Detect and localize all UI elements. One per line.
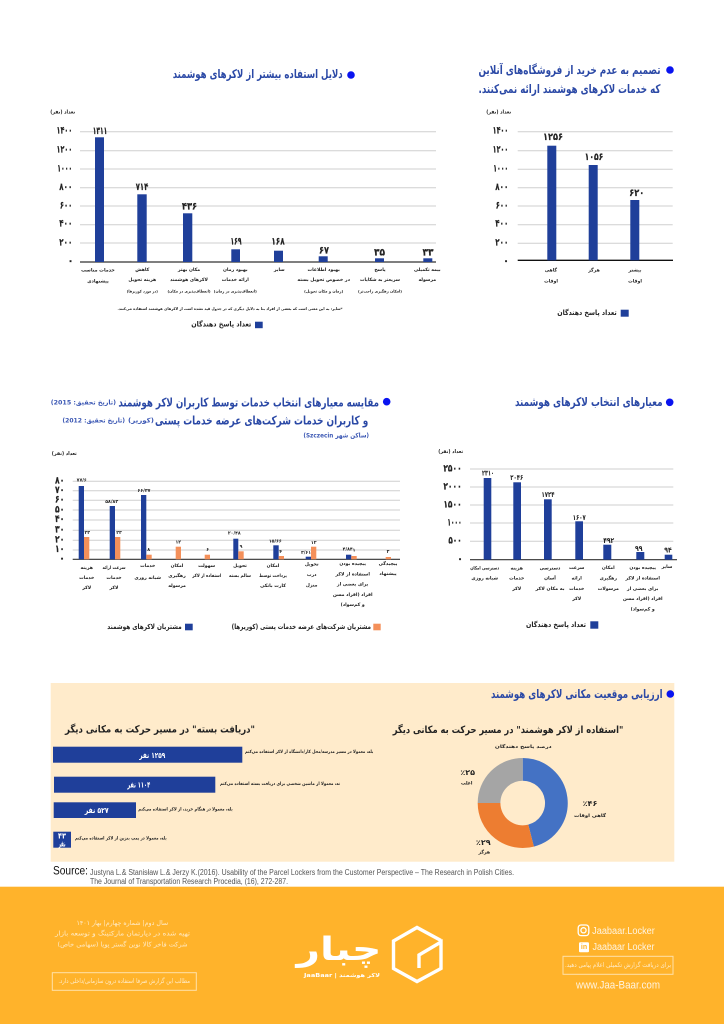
grid and y axis: ۱۰ xyxy=(55,544,64,555)
heading xyxy=(478,62,661,97)
category labels: در خصوص تحویل بسته xyxy=(297,278,351,283)
category labels: استفاده از لاکر xyxy=(334,572,370,578)
category labels: پیشنهادی xyxy=(87,280,109,284)
heading: (ساکن شهر Szczecin) xyxy=(303,432,369,440)
category labels xyxy=(81,267,441,294)
category labels: رهگیری xyxy=(600,574,617,582)
category labels: پاسخ xyxy=(374,268,386,273)
bar values: ۲۳ xyxy=(84,530,90,536)
bar chart xyxy=(547,146,639,260)
grid and y axis: ۰ xyxy=(503,256,509,267)
category labels: امکان xyxy=(171,563,184,569)
bar values xyxy=(58,751,165,848)
category labels: بهبود اطلاعات xyxy=(308,268,340,273)
grid and y axis: ۰ xyxy=(59,554,65,564)
category labels: گاهی xyxy=(545,266,557,274)
subheading: locker use: "استفاده از لاکر هوشمند" در مسیر حرکت به مکانی دیگر xyxy=(392,723,623,736)
category labels: پیچیده بودن xyxy=(629,566,656,571)
heading: (تاریخ تحقیق: 2012) xyxy=(62,417,125,425)
category labels: پیچیده بودن xyxy=(339,562,366,567)
axis unit: تعداد (نفر) xyxy=(52,451,77,457)
source citation: The Journal of Transportation Research Procedia, (16), 272-287. xyxy=(90,877,288,886)
category labels: به مکان لاکر xyxy=(534,586,565,592)
category labels: مرسوله xyxy=(418,278,436,283)
category labels: برای بعضی از xyxy=(626,587,659,592)
category labels: آسان xyxy=(544,576,556,582)
category labels: استفاده از لاکر xyxy=(624,576,660,582)
heading: معیارهای انتخاب لاکرهای هوشمند xyxy=(515,395,663,410)
grid and y axis: ۶۰۰ xyxy=(496,200,508,212)
category labels: (در مورد کوریرها) xyxy=(127,290,158,294)
footer: publication info: سال دوم| شماره چهارم| بهار ۱۴۰۱ xyxy=(76,919,168,927)
grid and y axis: ۳۰ xyxy=(55,524,64,536)
grid and y axis: ۱۴۰۰ xyxy=(57,126,72,136)
category labels: و کم‌سواد) xyxy=(341,602,365,608)
bar values: ۴۹۲ xyxy=(603,536,615,545)
logo wordmark: لاکر هوشمند | JaaBaar xyxy=(303,972,380,979)
grid and y axis: ۲۰۰ xyxy=(495,238,508,248)
legend: تعداد پاسخ دهندگان xyxy=(191,320,252,329)
grid and y axis: ۸۰ xyxy=(55,476,64,486)
category labels: لاکر xyxy=(571,596,581,602)
category labels: پیشنهاد xyxy=(379,572,397,577)
bar values: ۶۷ xyxy=(319,246,329,256)
bar values: ۵۸/۸۳ xyxy=(105,499,118,505)
grid and y axis: ۴۰ xyxy=(55,514,64,525)
bar chart xyxy=(484,478,672,560)
category labels: منزل xyxy=(306,584,318,588)
category labels: سرعت ارائه xyxy=(102,566,126,571)
bar values: ۹۹ xyxy=(635,544,643,553)
bar values: ۸ xyxy=(147,548,150,553)
bar values: ۳/۶۱ xyxy=(301,550,311,556)
axis unit: تعداد (نفر) xyxy=(438,449,463,455)
category labels: (انعطاف‌پذیری در مکان) xyxy=(168,290,211,294)
category labels: پرداخت توسط xyxy=(259,574,287,579)
footer: internal use notice: مطالب این گزارش صرفا استفاده درون سازمانی/داخلی دارد. xyxy=(58,977,190,985)
category labels: تحویل xyxy=(305,562,319,568)
bar values: ۹ xyxy=(240,545,243,550)
source citation xyxy=(53,866,514,886)
grid and y axis: ۸۰۰ xyxy=(495,182,508,193)
bars: courier customers xyxy=(84,537,391,559)
category labels: هزینه xyxy=(510,566,523,572)
logo wordmark: چبار xyxy=(294,930,382,968)
category labels: سالم بسته xyxy=(229,574,251,579)
bar values xyxy=(93,126,434,258)
icon: linkedin xyxy=(579,942,589,952)
chart caption: درصد پاسخ دهندگان xyxy=(495,743,552,750)
bar captions: بله، معمولا در پمپ بنزین از لاکر استفاده می‌کنم xyxy=(75,836,167,842)
heading: مقایسه معیارهای انتخاب خدمات توسط کاربران لاکر هوشمند xyxy=(118,395,379,410)
legend xyxy=(107,623,381,631)
category labels: برای بعضی از xyxy=(336,582,369,588)
bar values: ۱۲ xyxy=(311,540,317,546)
bar values: ۵۲۷ نفر xyxy=(84,806,109,815)
category labels: اوقات xyxy=(628,280,642,284)
category labels: امکان xyxy=(602,565,615,571)
footer: contact notice: برای دریافت گزارش تکمیلی اعلام پیامی دهید. xyxy=(565,961,671,969)
category labels: ارائه خدمات xyxy=(222,278,249,283)
donut labels: هرگز xyxy=(478,848,490,856)
panel: reasons for using smart lockers more xyxy=(50,67,441,329)
website: www.Jaa-Baar.com xyxy=(575,980,660,992)
bar captions: بله، معمولا در مسیر مدرسه/محل کار/دانشگاه از لاکر استفاده می‌کنم xyxy=(245,748,374,755)
bar captions xyxy=(75,748,374,842)
category labels: خدمات xyxy=(79,576,94,581)
grid and y axis: ۴۰۰ xyxy=(495,218,508,230)
grid and y axis: ۲۵۰۰ xyxy=(443,464,462,474)
category labels: سهولت xyxy=(198,564,216,569)
instagram handle: Jaabaar.Locker xyxy=(592,926,655,937)
category labels: افراد (افراد مسن xyxy=(623,596,663,602)
bar values: ۴/۸۴ xyxy=(343,546,353,552)
category labels: (زمان و مکان تحویل) xyxy=(304,290,344,294)
heading marker xyxy=(666,690,674,698)
category labels: لاکرهای هوشمند xyxy=(170,277,208,283)
category labels: دسترسی xyxy=(540,566,561,572)
category labels: استفاده از لاکر xyxy=(191,573,222,579)
category labels: لاکر xyxy=(511,586,521,592)
category labels: هرگز xyxy=(587,266,600,274)
category labels: شبانه روزی xyxy=(134,576,161,581)
bar values: ۶۶/۳۷ xyxy=(138,488,151,494)
bar values xyxy=(77,478,390,556)
category labels: بیمه تکمیلی xyxy=(414,267,441,273)
bar values: ۲۳ xyxy=(116,530,122,536)
category labels xyxy=(544,266,642,284)
bar values xyxy=(543,132,644,199)
grid and y axis: ۵۰ xyxy=(55,504,64,516)
bar values: ۱۵/۶۶ xyxy=(269,538,282,544)
heading: reasons: دلایل استفاده بیشتر از لاکرهای هوشمند xyxy=(173,67,343,82)
bar values: ۲۰/۴۸ xyxy=(228,530,241,536)
grid and y axis: ۴۰۰ xyxy=(59,218,72,230)
bar values: ۶۲۰ xyxy=(629,188,644,199)
bar values: ۷۱۴ xyxy=(136,182,148,193)
panel: comparison of selection criteria xyxy=(51,395,400,631)
donut labels: اغلب xyxy=(461,782,473,786)
category labels: درب xyxy=(307,573,317,578)
category labels: (انعطاف‌پذیری در زمان) xyxy=(214,290,257,294)
bar values: ۴۳ xyxy=(58,832,66,840)
category labels: مکان بهتر xyxy=(177,267,200,273)
footer: publication info: تهیه شده در دپارتمان مارکتینگ و توسعه بازار xyxy=(54,929,190,937)
bar values: ۱۶۰۷ xyxy=(573,513,586,522)
category labels: سرعت xyxy=(569,566,585,571)
panel: locker location evaluation xyxy=(51,683,674,862)
bar values: ۱۳۱۱ xyxy=(93,126,107,137)
category labels: شبانه روزی xyxy=(471,576,498,582)
legend: مشتریان لاکرهای هوشمند xyxy=(107,623,182,631)
legend: تعداد پاسخ دهندگان xyxy=(526,620,586,629)
category labels: بهبود زمان xyxy=(223,268,248,273)
donut labels: ٪۲۹ xyxy=(476,838,491,847)
heading marker xyxy=(383,398,391,406)
category labels: سایر xyxy=(661,565,673,570)
grid and y axis: ۶۰۰ xyxy=(60,200,72,212)
grid and y axis xyxy=(57,126,436,267)
bar chart xyxy=(95,137,432,262)
category labels: مرسولات xyxy=(598,587,619,592)
heading: (تاریخ تحقیق: 2015) xyxy=(51,398,116,406)
source citation: Justyna L.& Stanisław L.& Jerzy K.(2016). Usability of the Parcel Lockers from the Customer Perspective – The Research in Polish Cities. xyxy=(90,868,514,877)
category labels: کاهش xyxy=(135,267,150,273)
category labels: لاکر xyxy=(81,585,91,591)
category labels: هزینه تحویل xyxy=(128,278,156,283)
footer: publication info xyxy=(54,919,190,948)
grid and y axis: ۷۰ xyxy=(55,485,64,496)
bar values: ۱۰۵۶ xyxy=(585,152,603,163)
bar values: ۱۶۹ xyxy=(230,236,242,248)
icon: linkedin: in xyxy=(581,944,587,951)
category labels: (امکان رهگیری راحت‌تر) xyxy=(358,289,402,294)
grid and y axis: ۰ xyxy=(67,256,74,267)
category labels: هزینه xyxy=(80,566,93,571)
axis unit: تعداد (نفر) xyxy=(50,110,75,116)
category labels: سریعتر به شکایات xyxy=(360,277,400,283)
category labels: خدمات xyxy=(140,564,155,569)
heading marker xyxy=(347,71,355,79)
subheading: parcel pickup: "دریافت بسته" در مسیر حرکت به مکانی دیگر xyxy=(64,722,255,736)
footer: publication info: شرکت فاخر کالا نوین گستر پویا (سهامی خاص) xyxy=(58,940,188,948)
bar values: ۱۲۵۶ xyxy=(543,132,563,143)
category labels: تحویل xyxy=(233,564,247,569)
heading marker xyxy=(666,398,674,406)
bar values: ۱۷۲۴ xyxy=(542,490,555,499)
bar values: ۱ xyxy=(353,548,355,554)
grid and y axis: ۱۲۰۰ xyxy=(493,144,508,156)
panel background xyxy=(51,683,674,862)
donut labels: ٪۴۶ xyxy=(583,799,597,808)
category labels: اوقات xyxy=(544,280,558,284)
category labels xyxy=(470,565,673,612)
category labels: دسترسی امکان xyxy=(470,566,500,572)
grid and y axis: ۲۰۰۰ xyxy=(443,482,462,492)
category labels: ارائه xyxy=(572,576,582,582)
bar captions: نه، معمولا از ماشین شخصی برای دریافت بسته استفاده می‌کنم xyxy=(220,781,340,787)
bar values: ۴ xyxy=(279,550,282,555)
grid and y axis: ۰ xyxy=(457,554,463,565)
grid and y axis: ۶۰ xyxy=(55,494,64,506)
grid and y axis: ۲۰۰ xyxy=(59,238,72,248)
logo wordmark xyxy=(294,930,382,979)
bar values: ۲۰۴۶ xyxy=(510,473,523,482)
footer band xyxy=(0,887,724,1024)
grid and y axis xyxy=(493,126,673,267)
heading: تصمیم به عدم خرید از فروشگاه‌های آنلاین xyxy=(478,62,660,78)
horizontal bars xyxy=(53,747,242,848)
linkedin handle: Jaabaar Locker xyxy=(592,942,655,953)
category labels: سایر xyxy=(273,268,285,273)
grid and y axis: ۱۴۰۰ xyxy=(493,126,508,136)
bar values: ۱۱۰۴ نفر xyxy=(127,780,150,790)
bar values xyxy=(482,468,672,554)
category labels: پیچیدگی xyxy=(379,560,398,567)
bar values: نفر xyxy=(58,840,66,848)
heading marker xyxy=(666,66,674,74)
bars: smart locker customers xyxy=(79,486,351,559)
category labels: خدمات مناسب xyxy=(81,268,115,274)
category labels: مرسوله xyxy=(168,584,186,589)
grid and y axis: ۱۰۰۰ xyxy=(57,164,72,174)
grid and y axis xyxy=(55,476,400,564)
category labels: امکان xyxy=(267,563,280,569)
heading: ارزیابی موقعیت مکانی لاکرهای هوشمند xyxy=(491,687,663,702)
legend: تعداد پاسخ دهندگان xyxy=(557,308,617,317)
panel: smart locker selection criteria xyxy=(438,395,677,629)
category labels: رهگیری xyxy=(168,572,186,579)
heading xyxy=(51,395,379,440)
footer: contact notice xyxy=(563,956,673,974)
donut labels: گاهی اوقات xyxy=(574,812,606,819)
heading: (کوریر) xyxy=(128,417,154,425)
grid and y axis xyxy=(443,464,677,565)
category labels: و کم‌سواد) xyxy=(631,606,655,612)
grid and y axis: ۱۲۰۰ xyxy=(57,144,72,156)
bar values: ۱۲۵۹ نفر xyxy=(139,751,165,760)
category labels: کارت بانکی xyxy=(260,583,286,589)
category labels xyxy=(79,560,398,608)
heading: و کاربران خدمات شرکت‌های عرضه خدمات پستی xyxy=(155,414,368,429)
bar values: ۴۳۶ xyxy=(182,202,197,212)
donut labels xyxy=(460,768,606,856)
category labels: خدمات xyxy=(509,576,524,582)
bar values: ۹۴ xyxy=(664,546,672,554)
grid and y axis: ۸۰۰ xyxy=(59,182,72,193)
bar values: ۱۲ xyxy=(175,540,181,546)
category labels: افراد (افراد مسن xyxy=(333,592,373,598)
panel: decision not to buy from online stores xyxy=(478,62,674,317)
bar values: ۲ xyxy=(387,549,390,555)
donut labels: ٪۲۵ xyxy=(460,768,476,777)
icon: instagram xyxy=(578,925,589,936)
bar values: ۳۵ xyxy=(374,248,385,258)
grid and y axis: ۲۰ xyxy=(55,534,64,546)
legend: مشتریان شرکت‌های عرضه خدمات پستی (کوریرها) xyxy=(232,623,371,631)
bar values: ۲۳۱۰ xyxy=(482,468,494,478)
bar values: ۳۳ xyxy=(422,248,434,258)
donut chart xyxy=(489,769,556,837)
bar values: ۱۶۸ xyxy=(271,236,285,248)
category labels: خدمات xyxy=(106,576,122,581)
logo hexagon icon xyxy=(394,928,441,982)
category labels: بیشتر xyxy=(627,268,642,274)
footer: internal use notice xyxy=(52,973,196,990)
grid and y axis: ۵۰۰ xyxy=(448,536,462,546)
category labels: خدمات xyxy=(569,587,584,592)
footnote: *سایر: به این معنی است که بعضی از افراد بنا به دلایل دیگری که در جدول قید نشده است از لاکرهای هوشمند استفاده می‌کنند. xyxy=(118,306,343,311)
axis unit: تعداد (نفر) xyxy=(486,110,511,116)
category labels: لاکر xyxy=(109,585,118,591)
grid and y axis: ۱۵۰۰ xyxy=(443,500,462,510)
bar values: ۶ xyxy=(206,548,209,553)
bar captions: بله، معمولا در هنگام خرید، از لاکر استفاده می‌کنم xyxy=(138,806,233,812)
heading: که خدمات لاکرهای هوشمند ارائه نمی‌کنند. xyxy=(478,82,661,97)
grid and y axis: ۱۰۰۰ xyxy=(447,518,462,528)
grid and y axis: ۱۰۰۰ xyxy=(493,164,508,174)
bar values: ۷۷/۶ xyxy=(77,478,87,484)
source citation: Source: xyxy=(53,866,88,878)
